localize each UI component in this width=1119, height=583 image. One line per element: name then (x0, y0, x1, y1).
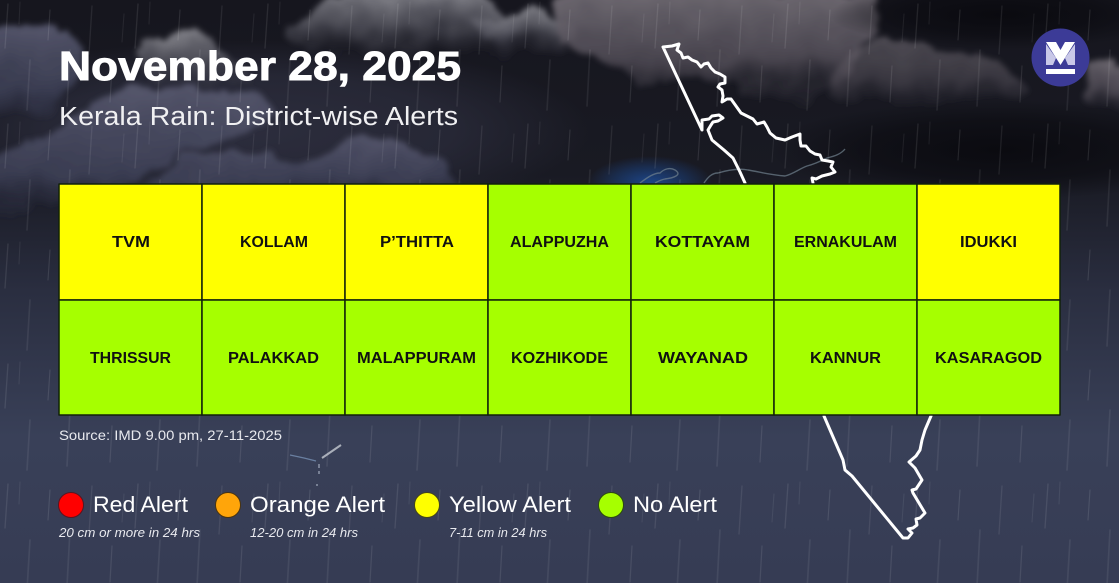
cell: ALAPPUZHA: ALAPPUZHA (510, 234, 609, 251)
legend (58, 492, 717, 540)
subtitle: Kerala Rain: District-wise Alerts (59, 103, 458, 131)
map: Kerala outline (663, 44, 931, 538)
cell: PALAKKAD (202, 300, 345, 415)
cell: KOZHIKODE (488, 300, 631, 415)
legend: orange alert (216, 492, 385, 540)
logo (1032, 28, 1090, 86)
cell: KOLLAM (202, 184, 345, 300)
legend: no alert: No Alert (633, 492, 717, 517)
cell: KOTTAYAM: KOTTAYAM (655, 234, 750, 251)
cell: KOTTAYAM (631, 184, 774, 300)
cell: P'THITTA (345, 184, 488, 300)
cell: IDUKKI: IDUKKI (960, 234, 1017, 251)
cell: IDUKKI (917, 184, 1060, 300)
cell: KOZHIKODE: KOZHIKODE (511, 350, 608, 367)
legend: orange alert: Orange Alert (250, 492, 385, 517)
legend: no alert (598, 492, 717, 518)
legend: yellow alert: 7-11 cm in 24 hrs (449, 526, 547, 540)
table: district alerts (59, 184, 1060, 415)
legend: red alert: Red Alert (93, 492, 188, 517)
legend: yellow alert: Yellow Alert (449, 492, 571, 517)
cell: PALAKKAD: PALAKKAD (228, 350, 319, 367)
legend: red alert (58, 492, 200, 540)
legend: yellow alert (414, 492, 571, 540)
title: November 28, 2025 (59, 43, 461, 89)
cell: ERNAKULAM: ERNAKULAM (794, 234, 897, 251)
cell: THRISSUR (59, 300, 202, 415)
cell: WAYANAD (631, 300, 774, 415)
cell: KOLLAM: KOLLAM (240, 234, 308, 251)
cell: ALAPPUZHA (488, 184, 631, 300)
cell: MALAPPURAM (345, 300, 488, 415)
legend: red alert: 20 cm or more in 24 hrs (58, 526, 200, 540)
cell: KASARAGOD (917, 300, 1060, 415)
legend: orange alert: 12-20 cm in 24 hrs (250, 526, 358, 540)
cell: TVM (59, 184, 202, 300)
cell: KANNUR: KANNUR (810, 350, 881, 367)
cell: WAYANAD: WAYANAD (658, 350, 748, 367)
cell: TVM: TVM (112, 234, 150, 251)
source note: Source: IMD 9.00 pm, 27-11-2025 (59, 428, 282, 443)
cell: ERNAKULAM (774, 184, 917, 300)
cell: THRISSUR: THRISSUR (90, 350, 171, 367)
cell: MALAPPURAM: MALAPPURAM (357, 350, 476, 367)
cell: P'THITTA: P’THITTA (380, 234, 454, 251)
cell: KANNUR (774, 300, 917, 415)
cell: KASARAGOD: KASARAGOD (935, 350, 1042, 367)
